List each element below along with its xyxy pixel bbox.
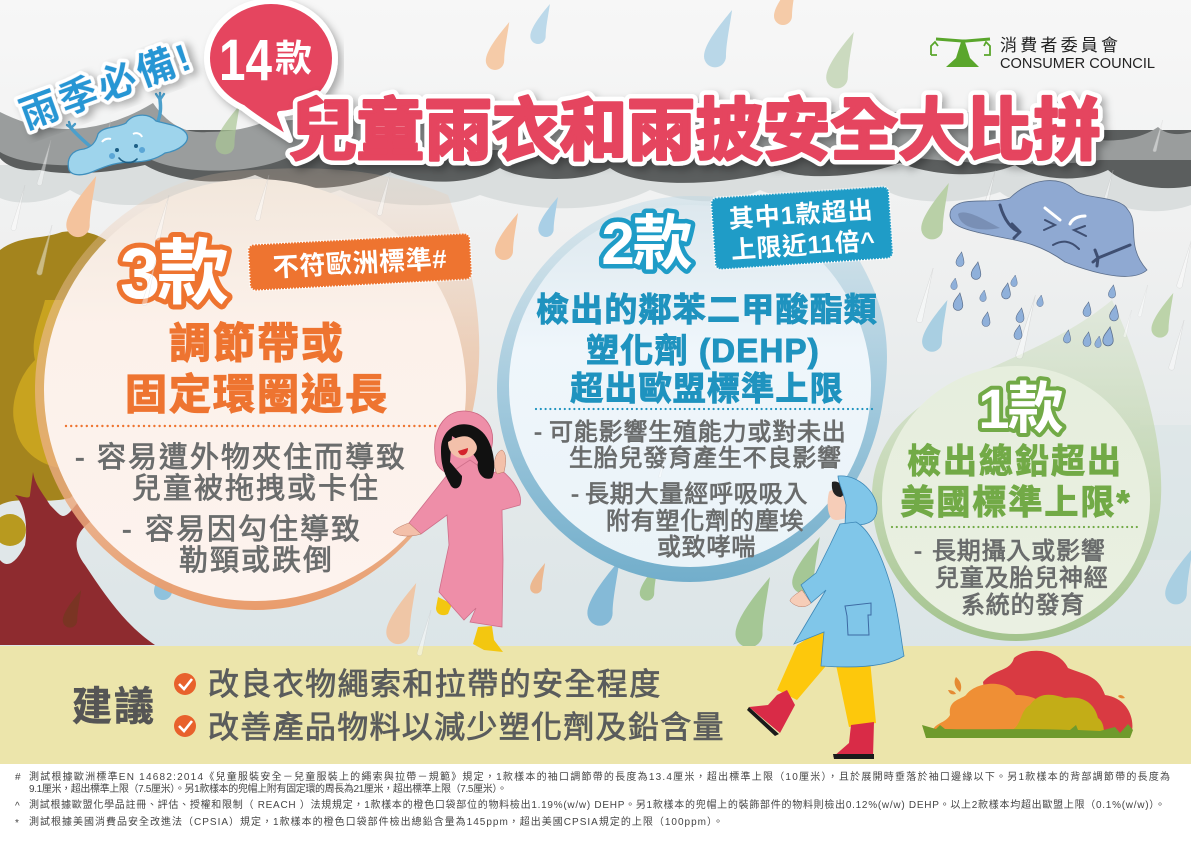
- pale lower clouds: [0, 165, 1191, 211]
- recommendation 1: 改良衣物繩索和拉帶的安全程度: [208, 667, 662, 702]
- green body text: 系統的發育: [961, 592, 1085, 619]
- rain streaks: [11, 120, 1191, 656]
- tree: [0, 231, 155, 645]
- orange body text: 容易遭外物夾住而導致: [97, 441, 407, 474]
- dotted divider: [892, 526, 1141, 528]
- green body text: -: [914, 538, 923, 565]
- hood: [435, 411, 493, 478]
- arm fingers: [67, 93, 164, 128]
- orange heading: 固定環圈過長: [125, 371, 389, 418]
- recommendation 2: 改善產品物料以減少塑化劑及鉛含量: [208, 710, 725, 745]
- cloud eye left: [115, 148, 119, 152]
- cuff hand: [790, 590, 811, 607]
- blue teardrop ring: [497, 196, 887, 582]
- hair: [832, 481, 847, 497]
- cloud body: [68, 115, 187, 175]
- panel: blue — plasticiser: [497, 186, 893, 582]
- logo text: [1000, 36, 1155, 72]
- cloud arms: [71, 100, 161, 148]
- panel: orange — adjustment strap: [35, 168, 479, 610]
- hood: [838, 476, 877, 525]
- hand right: [495, 450, 506, 474]
- grass: [922, 724, 1133, 738]
- colored rain drops behind panels: [63, 0, 1191, 648]
- red bush: [983, 651, 1132, 735]
- title fill boost: 兒童雨衣和雨披安全大比拼: [289, 94, 1101, 169]
- orange body text: -: [75, 442, 87, 474]
- blue heading: 檢出的鄰苯二甲酸酯類: [536, 291, 878, 328]
- orange heading: 調節帶或: [169, 320, 345, 367]
- character: happy cloud: [67, 93, 187, 175]
- yellow boots: [436, 597, 503, 652]
- recommendation label: 建議: [72, 685, 154, 729]
- character: boy in blue raincoat: [747, 476, 904, 759]
- blue heading: 塑化劑 (DEHP): [586, 332, 820, 369]
- hand left: [393, 523, 421, 536]
- orange body text: 容易因勾住導致: [145, 513, 362, 546]
- panel: green — lead: [872, 300, 1161, 641]
- mouth: [458, 448, 468, 455]
- footnote hash: 測試根據歐洲標準EN 14682:2014《兒童服裝安全－兒童服裝上的繩索與拉帶－規範》規定，1款樣本的袖口調節帶的長度為13.4厘米，超出標準上限（10厘米），且於展開時垂落於袖口邊緣以下。另1款樣本的背部調節帶的長度為: [29, 770, 1170, 783]
- logo text: 消費者委員會: [1000, 36, 1121, 55]
- callout: 14 models bubble: [207, 1, 335, 140]
- footer background: [0, 764, 1191, 842]
- bubble label: 款: [275, 38, 312, 79]
- recommendation: [72, 667, 725, 745]
- footnote hash: #: [15, 772, 21, 783]
- pocket: [845, 603, 871, 635]
- footnote asterisk: *: [15, 818, 19, 829]
- logo text: CONSUMER COUNCIL: [1000, 56, 1155, 72]
- orange body text: [75, 441, 407, 577]
- face: [828, 490, 846, 520]
- blue body text: 或致哮喘: [657, 534, 756, 561]
- yellow pants: [777, 627, 876, 727]
- blue body text: 附有塑化劑的塵埃: [606, 508, 804, 535]
- green heading: 檢出總鉛超出: [907, 443, 1123, 481]
- face: [448, 436, 477, 458]
- blue body text: 長期大量經呼吸吸入: [585, 481, 808, 508]
- blue body text: [534, 419, 847, 561]
- coat: [794, 522, 904, 667]
- footnote asterisk: 測試根據美國消費品安全改進法（CPSIA）規定，1款樣本的橙色口袋部件檢出總鉛含量為145ppm，超出美國CPSIA規定的上限（100ppm）。: [29, 815, 723, 828]
- blue body text: 可能影響生殖能力或對未出: [549, 419, 847, 446]
- logo: [931, 36, 1155, 72]
- canopy low blob: [0, 514, 26, 546]
- footnote caret: ^: [15, 801, 20, 812]
- orange inner circle: [44, 179, 466, 601]
- tree trunk: [0, 472, 155, 645]
- orange heading: [125, 320, 389, 418]
- falling droplets from grumpy cloud: [951, 252, 1118, 348]
- orange teardrop ring: [35, 168, 479, 610]
- footnote hash: 9.1厘米，超出標準上限（7.5厘米）。另1款樣本的兜帽上附有固定環的周長為21厘米，超出標準上限（7.5厘米）。: [29, 782, 507, 795]
- cloud smile: [119, 158, 137, 163]
- count 3: 3款: [120, 234, 228, 314]
- blue body text: -: [534, 419, 543, 446]
- green teardrop ring: [872, 300, 1161, 641]
- blue heading: 超出歐盟標準上限: [570, 370, 844, 407]
- boot soles: [747, 707, 874, 759]
- blue inner circle: [509, 205, 871, 567]
- footnote caret: 測試根據歐盟化學品註冊、評估、授權和限制（ REACH ）法規規定，1款樣本的橙色口袋部位的物料檢出1.19%(w/w) DEHP。另1款樣本的兜帽上的裝飾部件的物料則檢出0.12%(w/w) DEHP。以上2款樣本均超出歐盟上限（0.1%(w/w)）。: [29, 798, 1165, 811]
- green body text: [914, 538, 1109, 619]
- coat: [409, 460, 521, 627]
- cloud cheeks: [112, 150, 142, 156]
- green body text: 長期攝入或影響: [932, 538, 1106, 565]
- check icon 1: [174, 673, 196, 695]
- angry arms: [1000, 205, 1130, 266]
- count 2: 2款: [601, 210, 692, 277]
- green heading: [900, 443, 1132, 522]
- bush illustration: [922, 651, 1133, 738]
- character: girl in pink raincoat: [393, 411, 521, 652]
- bubble label: [219, 28, 312, 93]
- orange tag: 不符歐洲標準#: [272, 243, 448, 283]
- orange body text: 勒頸或跌倒: [179, 544, 334, 577]
- orange bush: [932, 684, 1040, 735]
- tagline: 雨季必備!: [15, 37, 196, 137]
- check icon 2: [174, 715, 196, 737]
- bubble shape: [207, 1, 335, 140]
- green body text: 兒童及胎兒神經: [935, 565, 1109, 592]
- green inner circle: [882, 366, 1150, 634]
- bubble label: 14: [219, 28, 272, 93]
- dotted divider: [536, 408, 873, 410]
- cloud shade: [958, 212, 1000, 229]
- count 1: 1款: [978, 377, 1063, 440]
- eyes and mouth: [1044, 220, 1086, 249]
- footnote hash: [15, 770, 1170, 795]
- orange body text: -: [122, 514, 134, 546]
- title: 兒童雨衣和雨披安全大比拼: [289, 94, 1101, 169]
- orange tag: [248, 233, 472, 291]
- red boots: [749, 690, 874, 757]
- brows: [1045, 208, 1085, 224]
- blue tag: 其中1款超出: [728, 196, 874, 234]
- cloud eye right: [134, 144, 138, 148]
- grey upper clouds: [0, 103, 1191, 171]
- green heading: 美國標準上限*: [900, 484, 1132, 522]
- olive bush: [1012, 695, 1104, 735]
- cloud brows: [102, 133, 142, 142]
- blue heading: [536, 291, 878, 407]
- pale building silhouette: [935, 420, 1191, 560]
- cloud band: [0, 103, 1191, 211]
- blue body text: 生胎兒發育產生不良影響: [569, 445, 842, 472]
- blue body text: -: [571, 481, 580, 508]
- tree canopy: [0, 231, 150, 505]
- dark middle clouds: [0, 130, 1191, 188]
- blue tag: 上限近11倍^: [730, 227, 876, 265]
- recommendation band: [0, 646, 1191, 764]
- footnotes: [15, 770, 1170, 829]
- character: grumpy cloud: [950, 181, 1147, 276]
- logo scale icon: [931, 39, 990, 67]
- cloud body: [950, 181, 1147, 276]
- blue tag: [711, 186, 893, 270]
- dotted divider: [66, 425, 452, 427]
- orange body text: 兒童被拖拽或卡住: [132, 472, 380, 505]
- hair: [441, 424, 494, 488]
- canopy highlights: [13, 300, 130, 468]
- falling leaves: [948, 677, 1125, 698]
